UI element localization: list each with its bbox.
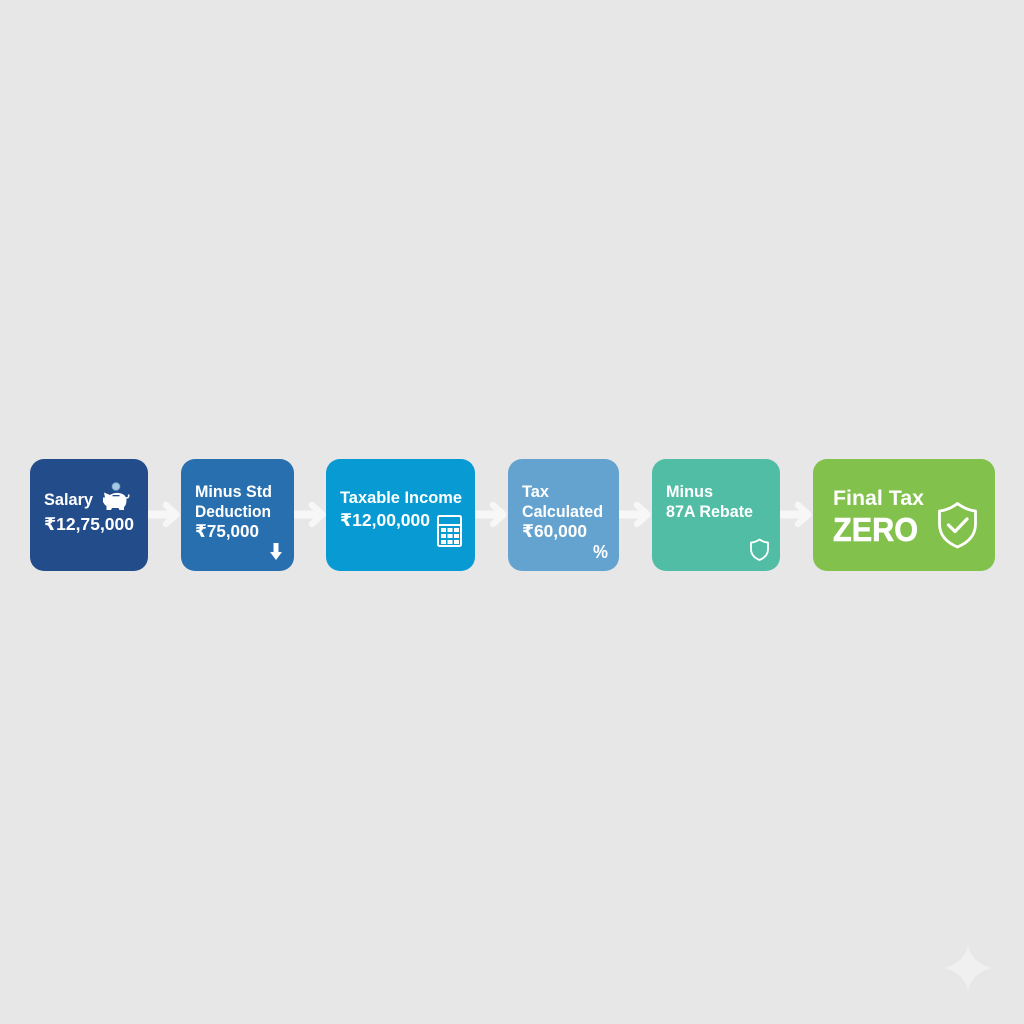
text: deduction label second line: Deduction xyxy=(195,503,271,521)
text: zero: ZERO xyxy=(833,511,918,548)
arrow: deduction to taxable income xyxy=(295,505,322,524)
text: tax amount: ₹60,000 xyxy=(522,521,587,541)
panel: standard deduction xyxy=(181,459,294,571)
arrow: tax calculated to rebate xyxy=(620,505,648,524)
icon: down arrow xyxy=(270,543,282,560)
text: salary label: Salary xyxy=(44,490,94,509)
icon: calculator xyxy=(438,516,461,546)
text: final tax label: Final Tax xyxy=(833,487,924,510)
text: taxable income amount: ₹12,00,000 xyxy=(340,510,430,530)
icon: piggy bank xyxy=(103,483,129,510)
text: minus label: Minus xyxy=(666,483,713,501)
icon: percent: % xyxy=(593,542,608,562)
text: rebate label: 87A Rebate xyxy=(666,503,753,521)
icon: large shield with check xyxy=(940,504,976,547)
text: calculated label: Calculated xyxy=(522,503,603,521)
icon: small shield xyxy=(751,540,768,560)
panel: 87A rebate xyxy=(652,459,780,571)
text: taxable income label: Taxable Income xyxy=(340,488,462,507)
text: salary amount: ₹12,75,000 xyxy=(44,514,134,534)
icon: sparkle watermark xyxy=(944,944,992,992)
panel: tax calculated xyxy=(508,459,619,571)
text: deduction label: Minus Std xyxy=(195,483,272,501)
arrow: rebate to final tax xyxy=(781,505,808,524)
panel: salary xyxy=(30,459,148,571)
text: deduction amount: ₹75,000 xyxy=(195,521,259,541)
panel: taxable income xyxy=(326,459,475,571)
arrow: salary to deduction xyxy=(149,505,176,524)
text: tax label: Tax xyxy=(522,483,550,501)
arrow: taxable income to tax calculated xyxy=(476,505,504,524)
panel: final tax xyxy=(813,459,995,571)
